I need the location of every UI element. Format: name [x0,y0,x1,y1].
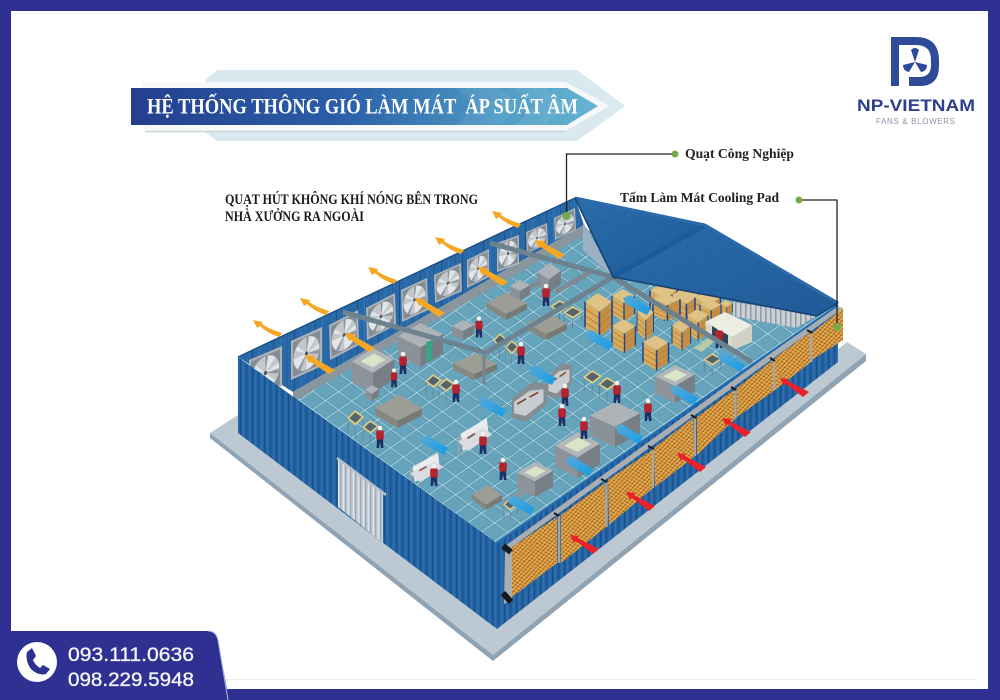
floor airflow arrows (blue) [420,295,745,515]
red intake arrows [570,378,809,554]
white enclosure [705,312,752,350]
heading: exhaust explanation: NHÀ XƯỞNG RA NGOÀI [225,208,364,225]
machines and work tables [347,263,722,520]
left wall with door [238,357,497,629]
factory building illustration [210,198,866,661]
logo tagline: FANS & BLOWERS [876,117,955,126]
workers [376,284,652,486]
heading: exhaust explanation [225,191,478,225]
shelving racks [585,283,733,370]
concrete slab [210,342,866,661]
icon: phone [17,642,57,682]
contact panel [0,631,229,700]
callout: cooling pad [620,190,841,331]
callout: industrial fan: Quạt Công Nghiệp [685,146,794,161]
orange exhaust arrows inside [305,240,565,374]
roof [575,198,838,316]
title banner [131,70,625,141]
wall coping on right side [497,305,838,543]
floor with grid [293,225,838,543]
back corrugated wall under roof [733,302,818,328]
title text: HỆ THỐNG THÔNG GIÓ LÀM MÁT ÁP SUẤT ÂM [147,92,578,118]
icon: P with fan [891,37,939,86]
logo: NP-Vietnam [857,37,975,126]
back wall [238,198,614,402]
heading: exhaust explanation: QUẠT HÚT KHÔNG KHÍ NÓNG BÊN TRONG [225,191,478,208]
orange exhaust arrows outside [253,211,521,337]
callout: cooling pad: Tấm Làm Mát Cooling Pad [620,190,779,205]
door with strip curtain [337,458,386,543]
phone numbers: 093.111.0636 [68,644,194,666]
callout: industrial fan [562,146,794,220]
right wall [497,305,838,629]
phone numbers: 098.229.5948 [68,669,194,691]
overhead beams [343,243,752,384]
phone numbers [68,644,194,691]
logo wordmark: NP-VIETNAM [857,96,975,115]
cooling pads [503,306,843,604]
exhaust fans [249,208,576,400]
